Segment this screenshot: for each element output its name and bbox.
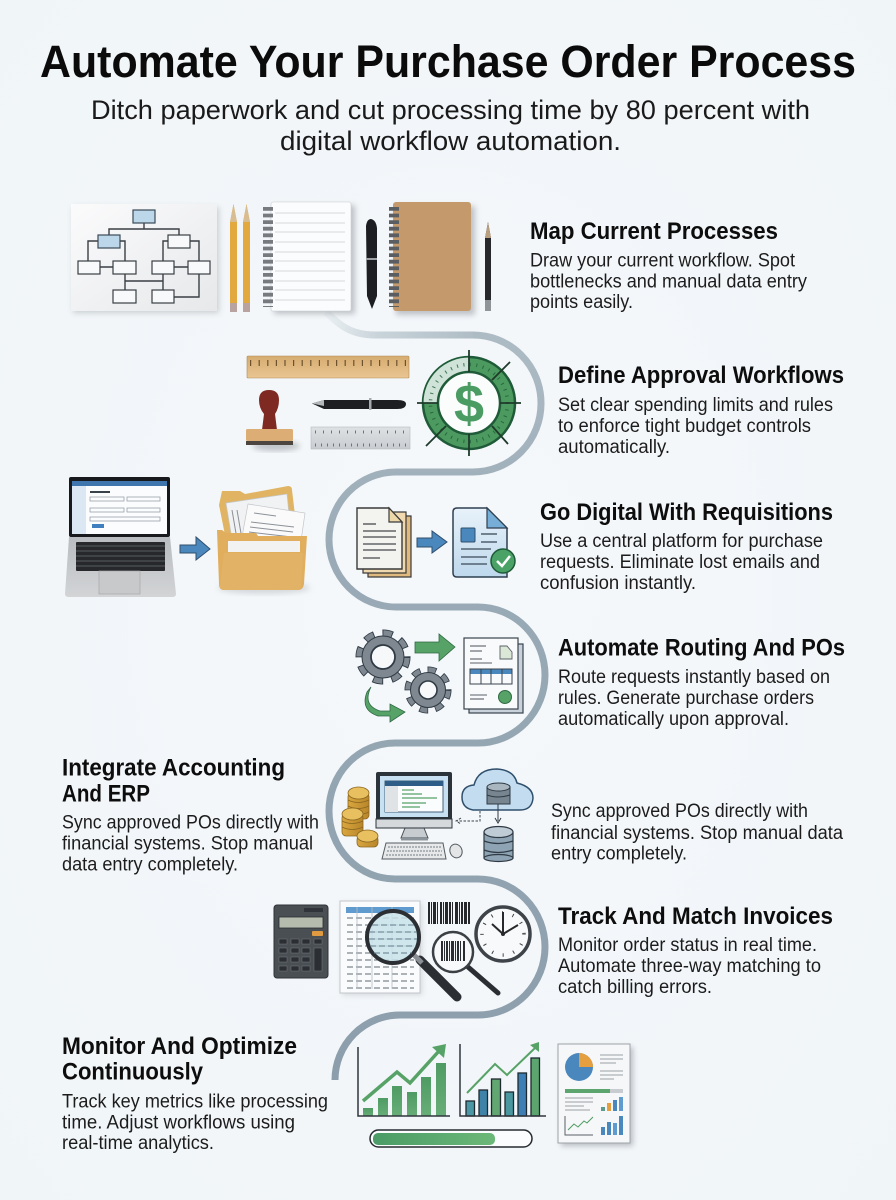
step 2 heading: Define Approval Workflows — [558, 362, 844, 389]
icon: database cylinder — [484, 826, 513, 862]
step 5 right description: financial systems. Stop manual data — [551, 823, 843, 844]
step 1 heading: Map Current Processes — [530, 218, 778, 245]
icon: kraft notebook — [393, 202, 475, 315]
icon: large gear — [360, 634, 406, 680]
subtitle: digital workflow automation. — [280, 126, 621, 156]
panel: step 5 integrate accounting and erp — [62, 754, 843, 876]
icon: stacked paper documents — [357, 508, 411, 577]
title: Automate Your Purchase Order Process — [40, 36, 856, 87]
step 5 heading: And ERP — [62, 780, 150, 808]
icon: cloud with database — [462, 769, 533, 823]
icon: dashed data link — [456, 811, 480, 824]
step 3 description: confusion instantly. — [540, 573, 696, 594]
step 6 description: Monitor order status in real time. — [558, 935, 817, 956]
step 5 right description: Sync approved POs directly with — [551, 801, 808, 822]
step 5 right description — [551, 801, 843, 864]
connector path — [326, 312, 545, 1080]
step 3 description: Use a central platform for purchase — [540, 531, 823, 552]
icon: large magnifying glass — [367, 911, 457, 997]
icon: budget dial with dollar sign: $ — [454, 374, 484, 434]
step 5 left description: financial systems. Stop manual — [62, 834, 313, 854]
icon: analog clock — [476, 907, 530, 961]
icon: wooden ruler — [247, 356, 409, 378]
step 7 description: Track key metrics like processing — [62, 1092, 328, 1112]
icon: open folder with papers — [217, 486, 310, 594]
panel: step 6 track and match invoices — [274, 901, 833, 998]
step 2 description: to enforce tight budget controls — [558, 416, 811, 437]
icon: budget dial with dollar sign — [417, 350, 521, 456]
step 5 left description: data entry completely. — [62, 854, 238, 876]
icon: digital document with check — [453, 508, 515, 577]
panel: step 3 go digital with requisitions — [65, 477, 833, 597]
step 3 heading: Go Digital With Requisitions — [540, 499, 833, 526]
step 1 description — [530, 250, 807, 313]
step 4 description: automatically upon approval. — [558, 709, 789, 730]
subtitle — [91, 95, 810, 156]
step 2 description: automatically. — [558, 437, 670, 458]
step 7 description: time. Adjust workflows using — [62, 1112, 295, 1134]
step 2 description — [558, 395, 833, 458]
step 1 description: Draw your current workflow. Spot — [530, 250, 796, 272]
icon: pencil — [485, 222, 491, 311]
icon: small gear — [408, 670, 448, 710]
step 5 heading: Integrate Accounting — [62, 754, 285, 782]
icon: curved green arrow — [365, 687, 405, 722]
step 7 heading: Monitor And Optimize — [62, 1033, 297, 1060]
step 3 description: requests. Eliminate lost emails and — [540, 552, 820, 573]
step 5 heading — [62, 754, 285, 808]
icon: report page with charts — [558, 1044, 633, 1146]
panel: step 4 automate routing and pos — [360, 634, 845, 730]
icon: green arrow right — [415, 634, 455, 661]
step 1 description: bottlenecks and manual data entry — [530, 272, 807, 292]
step 7 description: real-time analytics. — [62, 1133, 214, 1154]
icon: calculator — [274, 905, 328, 978]
icon: gold coin stacks — [342, 787, 378, 847]
icon: blue arrow to folder — [180, 537, 210, 560]
icon: conversion arrow — [417, 531, 447, 553]
icon: keyboard and mouse — [382, 842, 464, 860]
icon: rubber stamp — [246, 390, 300, 451]
icon: black pen — [366, 219, 377, 309]
icon: purchase order document — [464, 638, 523, 713]
step 7 heading — [62, 1033, 297, 1086]
step 6 description — [558, 935, 821, 998]
step 6 description: Automate three-way matching to — [558, 956, 821, 977]
panel: step 2 define approval workflows — [246, 350, 844, 458]
chart: blue and green bars — [460, 1042, 546, 1116]
step 5 left description: Sync approved POs directly with — [62, 812, 319, 834]
step 4 heading: Automate Routing And POs — [558, 634, 845, 662]
step 6 heading: Track And Match Invoices — [558, 903, 833, 930]
icon: two pencils — [230, 204, 250, 312]
icon: fountain pen — [312, 398, 406, 410]
step 4 description: Route requests instantly based on — [558, 667, 830, 688]
step 5 left description — [62, 812, 319, 876]
panel: step 1 map current processes — [71, 202, 807, 315]
step 6 description: catch billing errors. — [558, 977, 712, 998]
icon: barcode — [428, 902, 471, 924]
panel: step 7 monitor and optimize continuously — [62, 1033, 633, 1154]
progress bar — [370, 1130, 532, 1147]
step 3 description — [540, 531, 823, 594]
step 4 description: rules. Generate purchase orders — [558, 688, 814, 709]
subtitle: Ditch paperwork and cut processing time by 80 percent with — [91, 95, 810, 125]
step 5 right description: entry completely. — [551, 844, 687, 864]
icon: steel ruler — [311, 427, 410, 449]
step 4 description — [558, 667, 830, 730]
icon: spiral notepad — [268, 202, 355, 314]
icon: flowchart on paper — [71, 204, 219, 313]
step 7 heading: Continuously — [62, 1058, 203, 1086]
icon: invoice spreadsheet — [340, 901, 422, 995]
icon: desktop computer — [376, 772, 452, 840]
step 1 description: points easily. — [530, 292, 633, 313]
icon: small magnifying glass on barcode — [433, 932, 498, 993]
chart: green rising bars — [358, 1044, 450, 1116]
icon: laptop with form — [65, 477, 176, 597]
step 2 description: Set clear spending limits and rules — [558, 395, 833, 416]
step 7 description — [62, 1092, 328, 1154]
